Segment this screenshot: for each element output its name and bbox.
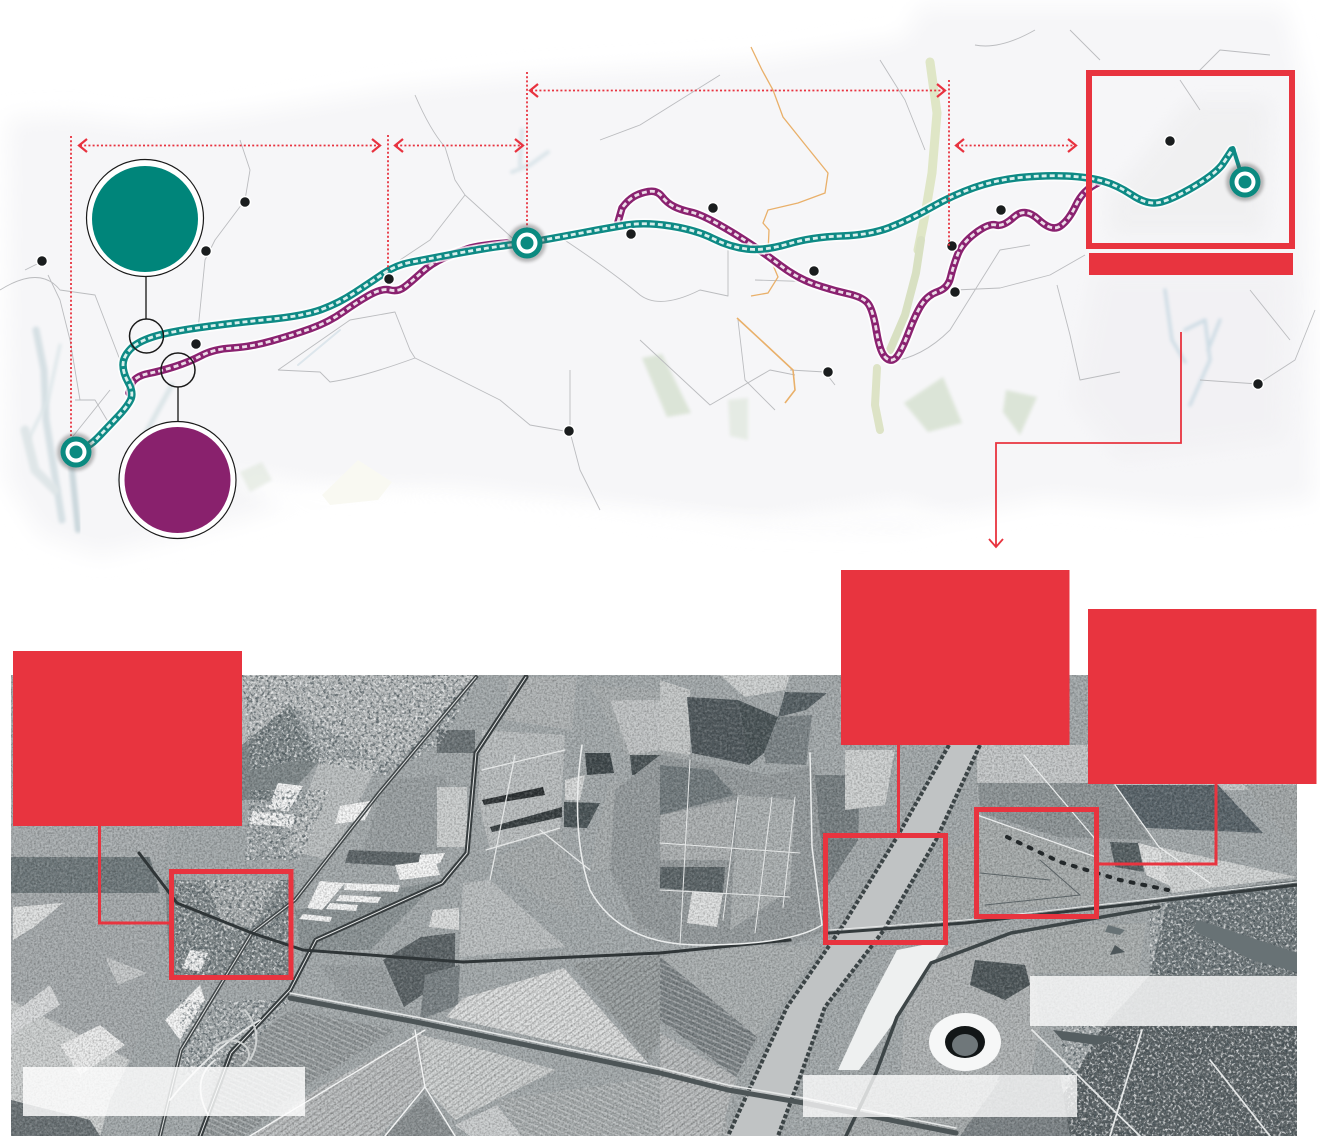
aerial: industrial buildings <box>165 783 445 1040</box>
callout: river crossing <box>826 570 1070 942</box>
town markers <box>36 136 1264 436</box>
aerial: roads <box>139 677 1297 1136</box>
caption plate: centre <box>803 1075 1077 1117</box>
station node west <box>57 433 95 471</box>
highlight label bar <box>1089 253 1293 275</box>
aerial: land parcels west <box>11 675 475 1136</box>
legend: teal line badge <box>86 160 204 353</box>
highlight frame over final stretch <box>1089 73 1292 246</box>
legend: purple line badge <box>119 353 236 538</box>
aerial: orchard farm <box>610 675 895 1136</box>
aerial: stadium <box>929 1013 1001 1071</box>
orange road upper <box>751 47 828 296</box>
water and wetlands <box>25 130 1220 530</box>
distance arrow: segment 4 <box>956 139 1076 152</box>
caption plate: right <box>1030 976 1297 1026</box>
aerial: east fields and park <box>900 745 1297 1136</box>
caption plate: left <box>23 1067 305 1116</box>
aerial: dense urban and forest texture <box>175 675 1297 1136</box>
distance arrow: segment 2 <box>395 139 523 152</box>
aerial: river <box>728 745 980 1136</box>
green patches <box>240 354 1037 492</box>
aerial: lakes <box>1053 920 1297 1045</box>
green river corridor <box>875 62 937 430</box>
aerial: photo grain <box>11 675 1297 1136</box>
callout: west junction <box>13 651 291 978</box>
orange road lower <box>737 318 795 403</box>
panel: aerial photograph <box>11 675 1297 1136</box>
route: teal line <box>76 148 1245 452</box>
station node centre <box>508 224 546 262</box>
leader arrow to aerial view <box>989 332 1181 547</box>
aerial base <box>11 675 1297 1136</box>
terrain triangle <box>322 460 392 505</box>
map base terrain <box>6 6 1314 556</box>
station node east <box>1226 163 1264 201</box>
callout: east parkland <box>976 609 1316 916</box>
panel: route map <box>0 6 1315 556</box>
route: purple line <box>129 183 1098 393</box>
thin river lines <box>0 30 1315 510</box>
aerial: centre fields <box>205 677 730 1136</box>
distance arrow: segment 1 <box>79 139 380 152</box>
dotted segment dividers <box>71 72 949 436</box>
distance arrow: segment 3 <box>530 84 945 97</box>
